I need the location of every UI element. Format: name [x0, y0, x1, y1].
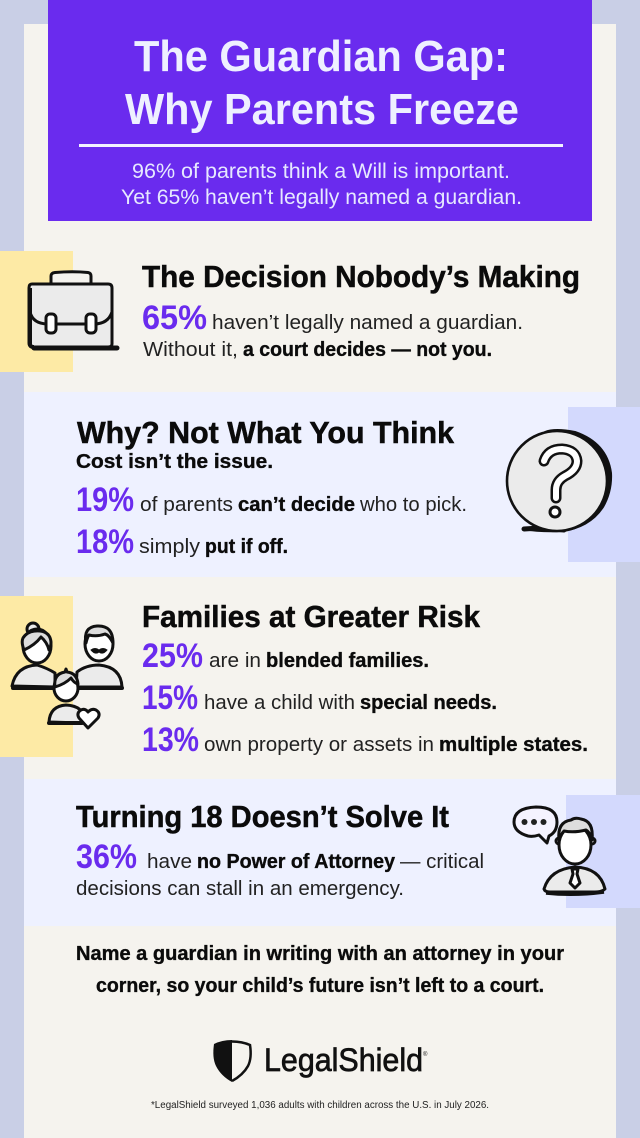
stat: 65%: [142, 299, 523, 337]
stat: 15%: [142, 679, 497, 717]
stat: 18%: simply: [139, 536, 200, 558]
stat: 36%: [76, 838, 484, 876]
stat: 15%: have a child with: [204, 692, 355, 714]
heading: Turning 18 Doesn’t Solve It: [76, 799, 449, 834]
subheading: Cost isn’t the issue.: [76, 451, 273, 473]
icon: shield: [213, 1040, 251, 1082]
stat: 13%: multiple states.: [439, 734, 588, 756]
panel: families at greater risk: [0, 596, 588, 759]
text: court decides: a court decides — not you.: [243, 339, 492, 361]
stat: 19%: 19%: [76, 481, 134, 519]
panel: the decision nobody's making: [0, 251, 580, 372]
logo: LegalShield: [213, 1040, 428, 1082]
stat: 13%: [142, 721, 588, 759]
heading: The Decision Nobody’s Making: [142, 259, 580, 294]
panel: turning 18 doesn't solve it: [76, 795, 640, 908]
stat: 25%: 25%: [142, 637, 203, 675]
icon: family: [12, 623, 122, 728]
title: [125, 32, 519, 134]
logo: LegalShield: ®: [423, 1051, 428, 1058]
heading: Why? Not What You Think: [77, 415, 455, 450]
stat: 18%: 18%: [76, 523, 134, 561]
panel: why? not what you think: [76, 407, 640, 562]
text: decisions stall: decisions can stall in an emergency.: [76, 878, 404, 900]
call to action: [76, 943, 564, 997]
call to action: Name a guardian in writing with an attorney in your: [76, 943, 564, 965]
icon: question mark: [507, 430, 611, 531]
stat: 19%: who to pick.: [359, 494, 467, 516]
stat: 19%: can’t decide: [238, 494, 355, 516]
stat: 36%: no Power of Attorney: [197, 851, 396, 873]
stat: 18%: put if off.: [205, 536, 288, 558]
subtitle: [121, 160, 522, 209]
logo: LegalShield: LegalShield: [264, 1042, 423, 1078]
text: court decides: Without it,: [143, 339, 238, 361]
icon: person with speech bubble: [514, 807, 605, 894]
stat: 15%: special needs.: [360, 692, 497, 714]
icon: briefcase: [29, 272, 117, 348]
stat: 15%: 15%: [142, 679, 198, 717]
stat: 19%: [76, 481, 467, 519]
stat: 25%: blended families.: [266, 650, 429, 672]
stat: 19%: of parents: [140, 494, 233, 516]
panel: header: [48, 0, 592, 221]
title: The Guardian Gap:: [134, 32, 508, 81]
subtitle: Yet 65% haven’t legally named a guardian.: [121, 186, 522, 209]
heading: Families at Greater Risk: [142, 599, 481, 634]
stat: 65%: haven’t legally named a guardian.: [212, 312, 523, 334]
stat: 36%: 36%: [76, 838, 137, 876]
stat: 18%: [76, 523, 288, 561]
footnote: *LegalShield surveyed 1,036 adults with children across the U.S. in July 2026.: [151, 1100, 489, 1111]
call to action: corner, so your child’s future isn’t left to a court.: [96, 975, 544, 997]
subtitle: 96% of parents think a Will is important.: [132, 160, 510, 183]
stat: 25%: [142, 637, 429, 675]
stat: 36%: — critical: [400, 851, 484, 873]
stat: 65%: 65%: [142, 299, 207, 337]
stat: 13%: 13%: [142, 721, 199, 759]
stat: 25%: are in: [209, 650, 261, 672]
stat: 13%: own property or assets in: [204, 734, 434, 756]
stat: 36%: have: [147, 851, 192, 873]
title: Why Parents Freeze: [125, 85, 519, 134]
